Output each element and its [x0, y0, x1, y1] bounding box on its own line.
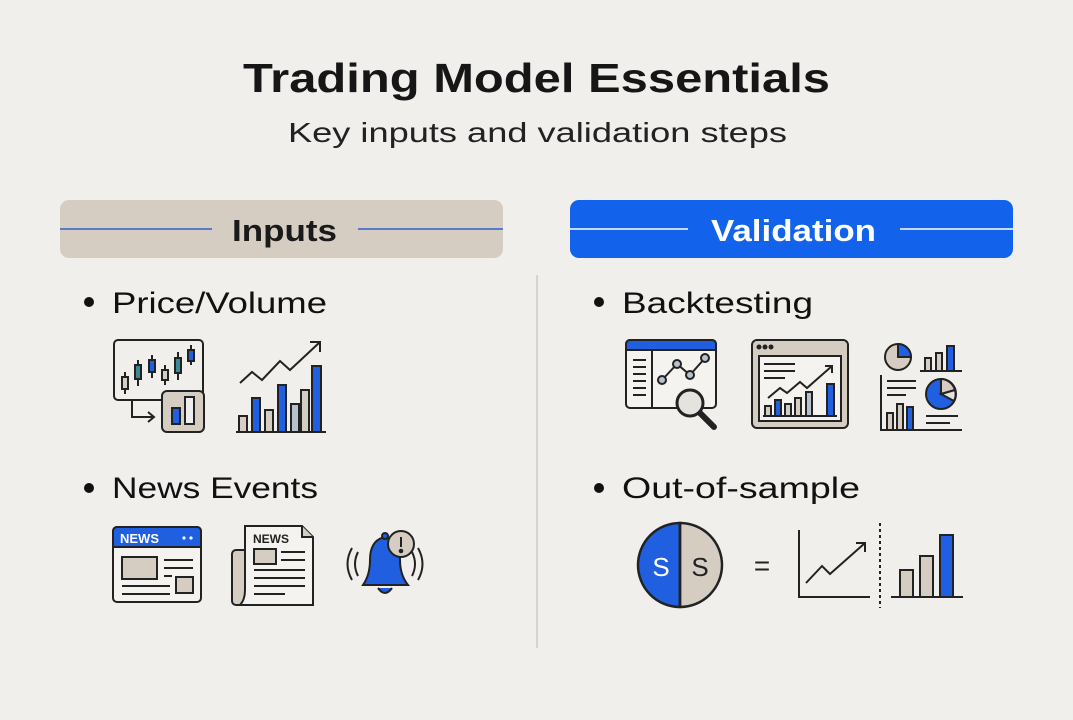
header: inputs: Inputs [232, 213, 337, 248]
icon: split sample circle: S [652, 552, 670, 582]
icon: out-of-sample bars [891, 535, 963, 597]
icon: line chart [799, 530, 870, 597]
subtitle: Key inputs and validation steps [288, 117, 787, 148]
icon: split sample circle: S [691, 552, 709, 582]
icon: split sample circle [638, 523, 722, 607]
icon: alert bell [348, 531, 422, 593]
icon: newspaper: NEWS [253, 532, 289, 546]
icon: news window [113, 527, 201, 602]
icon: candlestick chart [114, 340, 204, 432]
bullet: out-of-sample: Out-of-sample [622, 472, 860, 505]
icon: bar chart with trend [236, 342, 326, 432]
header: validation [570, 200, 1013, 258]
title: Trading Model Essentials [243, 55, 830, 101]
icon: news window: NEWS [120, 531, 159, 546]
icon: newspaper [232, 526, 313, 605]
bullet: backtesting: Backtesting [622, 287, 813, 320]
bullet: news events: News Events [112, 472, 318, 505]
icon: report window [752, 340, 848, 428]
equals sign: = [754, 550, 770, 581]
header: inputs [60, 200, 503, 258]
bullet: price/volume: Price/Volume [112, 287, 327, 320]
icon: browser with magnifier [626, 340, 716, 427]
header: validation: Validation [711, 213, 876, 248]
icon: dashboard [881, 344, 962, 430]
